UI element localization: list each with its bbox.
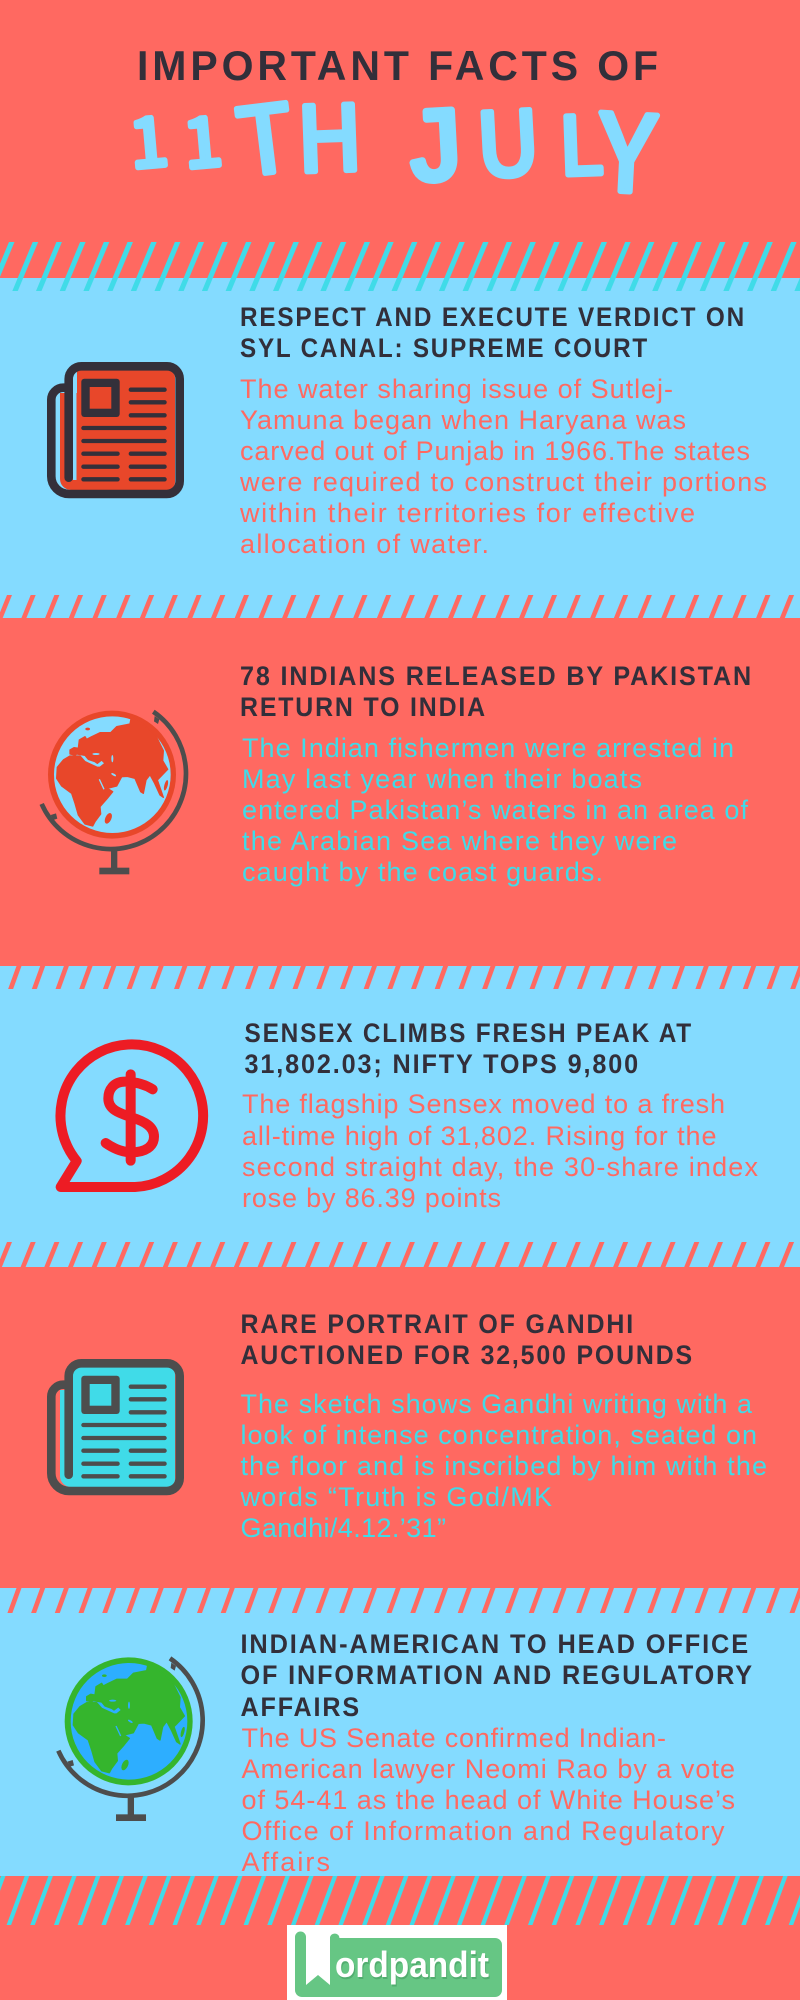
text: SYL canal body: were required to construct their portions	[239, 467, 767, 497]
text: Indians released body: May last year when their boats	[242, 764, 642, 794]
text: SYL canal body: allocation of water.	[240, 529, 489, 559]
heading: Indians released: 78 INDIANS RELEASED BY PAKISTAN	[240, 661, 753, 691]
text: SYL canal body: within their territories for effective	[239, 498, 695, 528]
title: 11th july: Y	[594, 67, 660, 224]
text: Indian-American body: The US Senate confirmed Indian-	[242, 1723, 666, 1753]
text: Indians released body: The Indian fishermen were arrested in	[242, 733, 734, 763]
text: Gandhi portrait body: the floor and is inscribed by him with the	[240, 1451, 767, 1481]
text: Gandhi portrait body	[240, 1389, 767, 1543]
heading: Gandhi portrait: RARE PORTRAIT OF GANDHI	[240, 1309, 635, 1339]
text: Gandhi portrait body: Gandhi/4.12.’31”	[240, 1513, 446, 1543]
text: Indians released body: the Arabian Sea where they were	[242, 826, 677, 856]
title: 11th july: H	[294, 66, 364, 198]
text: Indian-American body: American lawyer Neomi Rao by a vote	[242, 1754, 735, 1784]
heading: Sensex	[244, 1018, 693, 1079]
heading: Indians released	[240, 661, 753, 722]
panel: SYL canal	[0, 278, 800, 618]
heading: Indian-American: INDIAN-AMERICAN TO HEAD OFFICE	[240, 1629, 750, 1659]
panel: page header	[0, 0, 800, 278]
icon: dollar speech bubble	[60, 1044, 203, 1187]
title: 11th july: 1	[179, 86, 225, 188]
heading: SYL canal: RESPECT AND EXECUTE VERDICT ON	[240, 302, 746, 332]
text: SYL canal body: The water sharing issue of Sutlej-	[240, 374, 673, 404]
text: Indian-American body: Office of Information and Regulatory	[242, 1816, 725, 1846]
panel: footer	[0, 1876, 800, 2000]
text: Sensex body	[242, 1089, 758, 1213]
heading: Gandhi portrait	[240, 1309, 694, 1370]
heading: Indian-American: AFFAIRS	[240, 1692, 361, 1722]
text: Sensex body: all-time high of 31,802. Rising for the	[242, 1121, 716, 1151]
title: 11th july: 1	[125, 86, 171, 188]
text: SYL canal body: carved out of Punjab in 1966.The states	[240, 436, 750, 466]
text: Indian-American body	[242, 1723, 735, 1877]
text: Indians released body: caught by the coast guards.	[242, 857, 603, 887]
logo text: ordpandit	[335, 1944, 489, 1985]
heading: Indian-American	[240, 1629, 754, 1722]
title: 11th july: U	[473, 73, 543, 203]
text: Gandhi portrait body: look of intense concentration, seated on	[240, 1420, 757, 1450]
text: SYL canal body	[239, 374, 767, 559]
icon: globe red	[42, 711, 186, 874]
title: 11th july: T	[229, 64, 300, 203]
icon: bookmark	[306, 1925, 330, 1985]
icon: newspaper cyan	[51, 1363, 180, 1491]
text: Sensex body: The flagship Sensex moved to a fresh	[242, 1089, 725, 1119]
heading: Sensex: SENSEX CLIMBS FRESH PEAK AT	[244, 1018, 693, 1048]
heading: Indians released: RETURN TO INDIA	[240, 692, 487, 722]
heading: Sensex: 31,802.03; NIFTY TOPS 9,800	[244, 1049, 640, 1079]
heading: Gandhi portrait: AUCTIONED FOR 32,500 POUNDS	[240, 1340, 694, 1370]
text: Gandhi portrait body: The sketch shows Gandhi writing with a	[240, 1389, 753, 1419]
panel: Gandhi portrait	[0, 1267, 800, 1588]
text: Gandhi portrait body: words “Truth is God/MK	[240, 1482, 552, 1512]
text: Indians released body: entered Pakistan’s waters in an area of	[242, 795, 748, 825]
panel: Indian-American	[0, 1588, 800, 1877]
logo: wordpandit	[287, 1925, 507, 2000]
text: Sensex body: rose by 86.39 points	[242, 1183, 501, 1213]
panel: Sensex	[0, 966, 800, 1267]
icon: globe green	[58, 1657, 203, 1821]
title: important facts of: IMPORTANT FACTS OF	[137, 42, 662, 89]
title: 11th july: J	[400, 92, 469, 213]
panel: Indians released	[0, 618, 800, 966]
icon: newspaper red	[51, 366, 180, 494]
heading: Indian-American: OF INFORMATION AND REGULATORY	[240, 1660, 754, 1690]
text: Indian-American body: of 54-41 as the head of White House’s	[242, 1785, 735, 1815]
heading: SYL canal	[240, 302, 746, 363]
title: 11th july: L	[557, 82, 604, 199]
text: Indians released body	[242, 733, 748, 887]
heading: SYL canal: SYL CANAL: SUPREME COURT	[240, 333, 649, 363]
text: Sensex body: second straight day, the 30-share index	[242, 1152, 758, 1182]
text: Indian-American body: Affairs	[242, 1847, 330, 1877]
text: SYL canal body: Yamuna began when Haryana was	[240, 405, 686, 435]
